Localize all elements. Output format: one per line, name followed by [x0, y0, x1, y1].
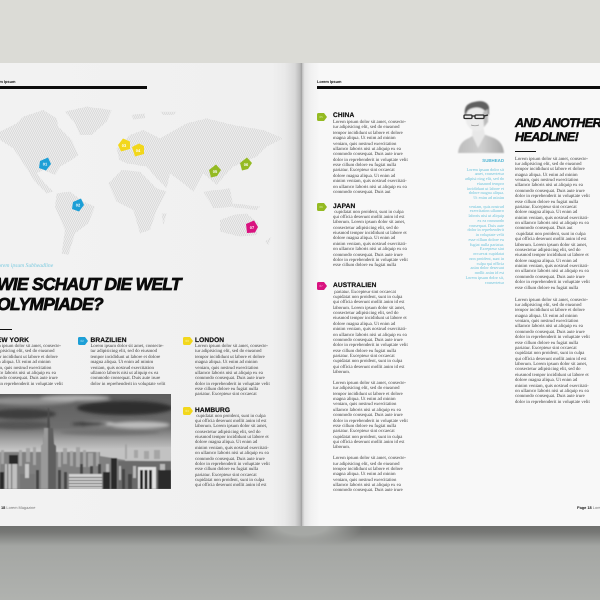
right column body second paragraph: esse cillum dolore eu fugiat nulla	[515, 340, 578, 346]
right column body: cupidatat non proident, sunt in culpa	[516, 232, 586, 237]
sidebar cyan text 1: eiusmod tempor	[477, 181, 504, 186]
Hamburg tag	[183, 407, 193, 415]
Hamburg body: on ullamco laboris nisi ut aliquip ex ea	[195, 451, 269, 456]
Japan body: minim veniam, quis nostrud exercitati-	[333, 242, 407, 247]
left magazine page	[0, 63, 302, 526]
Australien body: pariatur. Excepteur sint occaecat	[333, 429, 395, 434]
section: London	[183, 336, 270, 397]
Hamburg body: cupidatat non proident, sunt in culpa	[196, 414, 266, 418]
Brazilien tag: 02	[81, 339, 84, 343]
right column body second paragraph: Lorem ipsum dolor sit amet, consecte-	[515, 298, 588, 302]
right column body second paragraph: dolor in reprehenderit in voluptate velit	[515, 335, 590, 340]
sidebar cyan text 2: fugiat nulla pariatur.	[470, 242, 504, 247]
London body: tempor incididunt ut labore et dolore	[195, 355, 265, 360]
sidebar cyan text 2: laboris nisi ut aliquip	[469, 213, 504, 218]
photo: New York skyline	[0, 394, 171, 489]
sidebar cyan text 2: consequat. Duis aute	[469, 223, 504, 228]
map pin 04 yellow	[132, 144, 144, 156]
China body	[333, 120, 408, 195]
China body: esse cillum dolore eu fugiat nulla	[333, 163, 396, 168]
Australien body: tur adipisicing elit, sed do eiusmod	[333, 386, 400, 391]
sidebar cyan text 1: Lorem ipsum dolor sit	[467, 167, 504, 172]
China body: pariatur. Excepteur sint occaecat	[333, 168, 395, 173]
Australien body: tempor incididunt ut labore et dolore	[333, 392, 403, 397]
Japan body	[333, 210, 408, 268]
right column body second paragraph: tempor incididunt ut labore et dolore	[515, 308, 585, 313]
portrait photo	[458, 100, 504, 154]
Australien body: commodo consequat. Duis aute irure	[333, 488, 403, 493]
right column body: dolor in reprehenderit in voluptate velit	[515, 194, 590, 199]
Hamburg title: HAMBURG	[195, 406, 230, 414]
Hamburg tag: 04	[186, 409, 189, 413]
main headline: OLYMPIADE?	[0, 294, 103, 314]
Australien body: qui officia deserunt mollit anim id est	[333, 440, 404, 445]
section: Hamburg	[183, 406, 270, 488]
Australien body: laborum. Lorem ipsum dolor sit amet,	[333, 306, 405, 311]
Australien body: esse cillum dolore eu fugiat nulla	[333, 349, 396, 354]
London body: veniam, quis nostrud exercitation	[195, 366, 258, 370]
sidebar cyan text 2: Excepteur sint	[480, 246, 504, 251]
right column body second paragraph: magna aliqua. Ut enim ad minim	[515, 314, 578, 319]
Hamburg body: consectetur adipisicing elit, sed do	[195, 430, 261, 435]
Japan body: commodo consequat. Duis aute irure	[333, 252, 403, 258]
China body: dolore magna aliqua. Ut enim ad	[333, 174, 395, 179]
section: Brazilien	[78, 336, 166, 387]
China body: on ullamco laboris nisi ut aliquip ex ea	[333, 184, 407, 190]
London title: LONDON	[195, 336, 224, 344]
left page footer: 18 Lorem Magazine	[1, 504, 35, 510]
map pin 05 green: 05	[213, 169, 218, 174]
sidebar cyan text 1	[465, 167, 504, 200]
Hamburg body: commodo consequat. Duis aute irure	[195, 456, 265, 462]
Australien body: veniam, quis nostrud exercitation	[333, 478, 396, 483]
Australien body: Lorem ipsum dolor sit amet, consecte-	[333, 381, 406, 386]
China body: minim veniam, quis nostrud exercitati-	[333, 179, 407, 184]
China body: commodo consequat. Duis aute irure	[333, 152, 403, 157]
map pin 07 magenta	[246, 220, 258, 233]
second headline: AND ANOTHER	[515, 116, 600, 130]
right column body second paragraph: on ullamco laboris nisi ut aliquip ex ea	[515, 389, 589, 394]
London body: esse cillum dolore eu fugiat nulla	[195, 387, 258, 392]
Japan body: cupidatat non proident, sunt in culpa	[334, 210, 404, 214]
shadow gap below the gutter	[230, 526, 376, 548]
second headline	[514, 116, 600, 144]
right column body: minim veniam, quis nostrud exercitati-	[515, 216, 589, 221]
Japan tag: 06	[320, 205, 323, 209]
London body: pariatur. Excepteur sint occaecat	[195, 392, 257, 397]
Australien body: Lorem ipsum dolor sit amet, consecte-	[333, 456, 406, 461]
dotted world map	[0, 106, 282, 255]
right column body: on ullamco laboris nisi ut aliquip ex ea	[515, 221, 589, 226]
China body: commodo consequat. Duis aut	[333, 190, 391, 195]
map pin 03 yellow: 03	[122, 143, 127, 148]
map pin 03 yellow	[118, 138, 130, 152]
Australien body: minim veniam, quis nostrud exercitati-	[333, 327, 407, 332]
Brazilien body: Lorem ipsum dolor sit amet, consecte-	[90, 344, 164, 349]
right column body second paragraph: commodo consequat. Duis aute irure	[515, 330, 585, 335]
Australien body: veniam, quis nostrud exercitation	[333, 402, 396, 407]
Australien body: tur adipisicing elit, sed do eiusmod	[333, 462, 400, 466]
Japan title: JAPAN	[333, 203, 355, 210]
map pin 07 magenta: 07	[250, 225, 255, 230]
second headline: HEADLINE!	[515, 130, 578, 144]
right column body: consectetur adipisicing elit, sed do	[515, 248, 581, 253]
Brazilien body: veniam, quis nostrud exercitation	[90, 366, 154, 370]
Australien tag: 07	[320, 284, 323, 288]
London body: Lorem ipsum dolor sit amet, consecte-	[195, 344, 268, 349]
sidebar cyan text 2: anim dolor deserunt	[470, 265, 504, 270]
right column body second paragraph: ullamco laboris nisi ut aliquip ex ea	[515, 324, 583, 329]
London body: magna aliqua. Ut enim ad minim	[195, 360, 258, 365]
right column body: commodo consequat. Duis aute irure	[515, 275, 585, 280]
left page header bar	[0, 86, 147, 89]
sidebar cyan text 2: exercitation ullamco	[470, 208, 504, 213]
Australien body: ullamco laboris nisi ut aliquip ex ea	[333, 408, 401, 413]
sidebar subhead: SUBHEAD	[482, 158, 504, 162]
right column body second paragraph: pariatur. Excepteur sint occaecat	[515, 346, 577, 351]
right column body: commodo consequat. Duis aut	[515, 226, 573, 231]
sidebar cyan text 2: in voluptate velit	[476, 232, 504, 237]
Australien body: eiusmod tempor incididunt ut labore et	[333, 316, 407, 321]
main headline	[0, 274, 184, 314]
section: Japan	[317, 203, 408, 268]
Brazilien title: BRAZILIEN	[90, 336, 127, 344]
map pin 02 blue	[72, 198, 84, 212]
Hamburg body	[195, 414, 270, 488]
Brazilien body	[90, 344, 166, 387]
right column body: dolore magna aliqua. Ut enim ad	[515, 210, 577, 215]
right column body second paragraph: laborum. Lorem ipsum dolor sit amet,	[515, 362, 587, 367]
headline rule	[0, 328, 12, 330]
sidebar cyan text 2: veniam, quis nostrud	[469, 204, 504, 209]
China title: CHINA	[333, 112, 354, 119]
London tag: 03	[186, 339, 189, 343]
right column body: esse cillum dolore eu fugiat nulla	[515, 286, 578, 290]
Hamburg body: qui officia deserunt mollit anim id est	[195, 419, 266, 424]
Japan body: dolore magna aliqua. Ut enim ad	[333, 236, 395, 241]
right column body: commodo consequat. Duis aute irure	[515, 189, 585, 194]
Australien body: cupidatat non proident, sunt in culpa	[333, 435, 402, 440]
London body: ullamco laboris nisi ut aliquip ex ea	[195, 371, 263, 376]
Brazilien body: ullamco laboris nisi ut aliquip ex ea	[90, 371, 158, 376]
Australien body: on ullamco laboris nisi ut aliquip ex ea	[333, 332, 407, 338]
sidebar cyan text 2: ex ea commodo	[477, 218, 504, 223]
right column body: dolor in reprehenderit in voluptate velit	[515, 280, 590, 285]
sidebar cyan text 1: adipisi-cing elit, sed do	[465, 176, 504, 181]
sidebar cyan text 2: non proident, sunt in	[469, 256, 504, 261]
Japan body: on ullamco laboris nisi ut aliquip ex ea	[333, 247, 407, 252]
Hamburg body: esse cillum dolore eu fugiat nulla	[195, 467, 258, 472]
Australien body: cupidatat non proident, sunt in culpa	[333, 359, 402, 364]
sidebar cyan text 1: Ut enim ad minim	[473, 195, 504, 200]
sidebar cyan text 2: dolor in reprehenderit	[467, 227, 504, 232]
right column body: pariatur. Excepteur sint occaecat	[515, 205, 577, 210]
Japan body: qui officia deserunt mollit anim id est	[333, 215, 404, 220]
London tag	[183, 337, 193, 345]
Australien body: commodo consequat. Duis aute irure	[333, 413, 403, 418]
map pin 01 blue	[39, 158, 51, 170]
Australien tag	[317, 282, 327, 290]
sidebar cyan text 2	[466, 204, 504, 285]
Hamburg body: dolore magna aliqua. Ut enim ad	[195, 440, 257, 445]
China body: tempor incididunt ut labore et dolore	[333, 131, 403, 136]
right column body: tempor incididunt ut labore et dolore	[515, 167, 585, 172]
right column body second paragraph: qui officia deserunt mollit anim id est	[515, 357, 586, 362]
China body: ullamco laboris nisi ut aliquip ex ea	[333, 147, 401, 152]
right column body	[515, 156, 590, 290]
sidebar cyan text 2: occaecat cupidatat	[473, 251, 504, 256]
section: China	[317, 112, 408, 195]
Hamburg body: pariatur. Excepteur sint occaecat	[195, 473, 257, 478]
Japan tag	[317, 203, 327, 211]
sidebar cyan text 2: esse cillum dolore eu	[469, 237, 504, 242]
right column body second paragraph	[515, 298, 590, 405]
Australien body: ullamco laboris nisi ut aliquip ex ea	[333, 483, 401, 488]
London body: commodo consequat. Duis aute irure	[195, 376, 265, 381]
map pin 04 yellow: 04	[136, 148, 141, 153]
Australien body: dolor in reprehenderit in voluptate velit	[333, 343, 408, 348]
right page header bar	[317, 86, 600, 89]
right column body: magna aliqua. Ut enim ad minim	[515, 173, 578, 178]
map pin 02 blue: 02	[76, 202, 81, 208]
sidebar cyan text 1: amet, consectetur	[475, 171, 504, 176]
China tag: 05	[320, 115, 323, 119]
Hamburg body: cupidatat non proident, sunt in culpa	[195, 478, 264, 483]
London body: tur adipisicing elit, sed do eiusmod	[195, 349, 262, 354]
right column body second paragraph: eiusmod tempor incididunt ut labore et	[515, 373, 589, 378]
right column body second paragraph: commodo consequat. Duis aute irure	[515, 394, 585, 399]
Japan body: eiusmod tempor incididunt ut labore et	[333, 231, 407, 236]
sidebar cyan text 1: incididunt ut labore et	[467, 186, 504, 191]
right page header label: Lorem Ipsum	[317, 79, 341, 84]
right column body: qui officia deserunt mollit anim id est	[515, 237, 586, 242]
section: Australien	[317, 282, 408, 493]
right column body: eiusmod tempor incididunt ut labore et	[515, 253, 589, 258]
sidebar cyan text 2: culpa qui officia	[477, 261, 504, 266]
China body: veniam, quis nostrud exercitation	[333, 142, 396, 146]
China body: dolor in reprehenderit in voluptate velit	[333, 158, 408, 163]
Australien body	[333, 290, 408, 493]
Australien body: cupidatat non proident, sunt in culpa	[333, 295, 402, 300]
Japan body: laborum. Lorem ipsum dolor sit amet,	[333, 220, 405, 225]
Brazilien body: tur adipisicing elit, sed do eiusmod	[90, 349, 157, 354]
Australien body: magna aliqua. Ut enim ad minim	[333, 397, 396, 402]
China body: tur adipisicing elit, sed do eiusmod	[333, 125, 400, 130]
right column body: ullamco laboris nisi ut aliquip ex ea	[515, 183, 583, 188]
Japan body: consectetur adipisicing elit, sed do	[333, 226, 399, 231]
right column body second paragraph: veniam, quis nostrud exercitation	[515, 319, 578, 324]
Brazilien body: tempor incididunt ut labore et dolore	[90, 355, 160, 360]
map pin 06 green	[240, 158, 252, 170]
Australien body: laborum.	[333, 370, 350, 375]
China body: Lorem ipsum dolor sit amet, consecte-	[333, 120, 406, 125]
Hamburg body: laborum. Lorem ipsum dolor sit amet,	[195, 424, 267, 429]
London body	[195, 344, 270, 397]
China tag	[317, 113, 327, 121]
right column body second paragraph: dolore magna aliqua. Ut enim ad	[515, 378, 577, 383]
New York body	[0, 344, 63, 387]
sidebar cyan text 1: dolore magna aliqua.	[469, 190, 504, 195]
right column body second paragraph: tur adipisicing elit, sed do eiusmod	[515, 303, 582, 308]
map pin 06 green: 06	[244, 162, 249, 167]
sidebar cyan text 2: Lorem ipsum dolor sit,	[466, 275, 504, 280]
Brazilien body: magna aliqua. Ut enim ad minim	[90, 360, 153, 365]
map pin 01 blue: 01	[43, 162, 48, 166]
sidebar cyan text 2: consectetur	[485, 280, 504, 285]
Australien body: tempor incididunt ut labore et dolore	[333, 467, 403, 472]
Brazilien tag	[78, 337, 88, 345]
Australien body: consectetur adipisicing elit, sed do	[333, 311, 399, 316]
right column body: Lorem ipsum dolor sit amet, consecte-	[515, 156, 588, 162]
sidebar cyan text 2: mollit anim id est	[475, 270, 504, 275]
main headline: WIE SCHAUT DIE WELT	[0, 274, 181, 294]
Hamburg body: qui officia deserunt mollit anim id est	[195, 483, 266, 488]
Australien body: dolore magna aliqua. Ut enim ad	[333, 322, 395, 327]
Australien body: magna aliqua. Ut enim ad minim	[333, 472, 396, 477]
right column body: dolore magna aliqua. Ut enim ad	[515, 259, 577, 264]
Australien body: dolor in reprehenderit in voluptate velit	[333, 418, 408, 424]
Japan body: esse cillum dolore eu fugiat nulla	[333, 263, 396, 268]
right column body second paragraph: consectetur adipisicing elit, sed do	[515, 367, 581, 372]
Brazilien body: commodo consequat. Duis aute irure	[90, 376, 160, 381]
right column body second paragraph: cupidatat non proident, sunt in culpa	[515, 351, 584, 356]
map pin 05 green	[209, 164, 221, 178]
right column body: minim veniam, quis nostrud exercitati-	[515, 264, 589, 269]
right column body second paragraph: dolor in reprehenderit in voluptate velit	[515, 400, 590, 405]
right column body: tur adipisicing elit, sed do eiusmod	[515, 162, 582, 167]
Australien body: commodo consequat. Duis aute irure	[333, 338, 403, 343]
right column body: veniam, quis nostrud exercitation	[515, 178, 578, 183]
Australien body: qui officia deserunt mollit anim id est	[333, 300, 404, 305]
section: New York	[0, 336, 63, 387]
Australien body: pariatur. Excepteur sint occaecat	[334, 290, 396, 294]
right column body: laborum. Lorem ipsum dolor sit amet,	[515, 242, 587, 248]
Japan body: dolor in reprehenderit in voluptate velit	[333, 258, 408, 263]
Brazilien body: dolor in reprehenderit in voluptate velit	[90, 382, 165, 387]
Hamburg body: minim veniam, quis nostrud exercitati-	[195, 446, 269, 451]
right magazine page	[302, 63, 600, 526]
Hamburg body: eiusmod tempor incididunt ut labore et	[195, 435, 269, 440]
Australien body: esse cillum dolore eu fugiat nulla	[333, 424, 396, 429]
Australien title: AUSTRALIEN	[333, 282, 376, 289]
second headline rule	[515, 151, 536, 152]
right column body: on ullamco laboris nisi ut aliquip ex ea	[515, 269, 589, 274]
Australien body: pariatur. Excepteur sint occaecat	[333, 354, 395, 359]
China body: magna aliqua. Ut enim ad minim	[333, 136, 396, 141]
right column body second paragraph: minim veniam, quis nostrud exercitati-	[515, 384, 589, 388]
Hamburg body: dolor in reprehenderit in voluptate velit	[195, 462, 270, 467]
Australien body: laborum.	[333, 445, 350, 450]
Australien body: qui officia deserunt mollit anim id est	[333, 365, 404, 370]
right column body: esse cillum dolore eu fugiat nulla	[515, 200, 578, 204]
London body: dolor in reprehenderit in voluptate velit	[195, 382, 270, 387]
